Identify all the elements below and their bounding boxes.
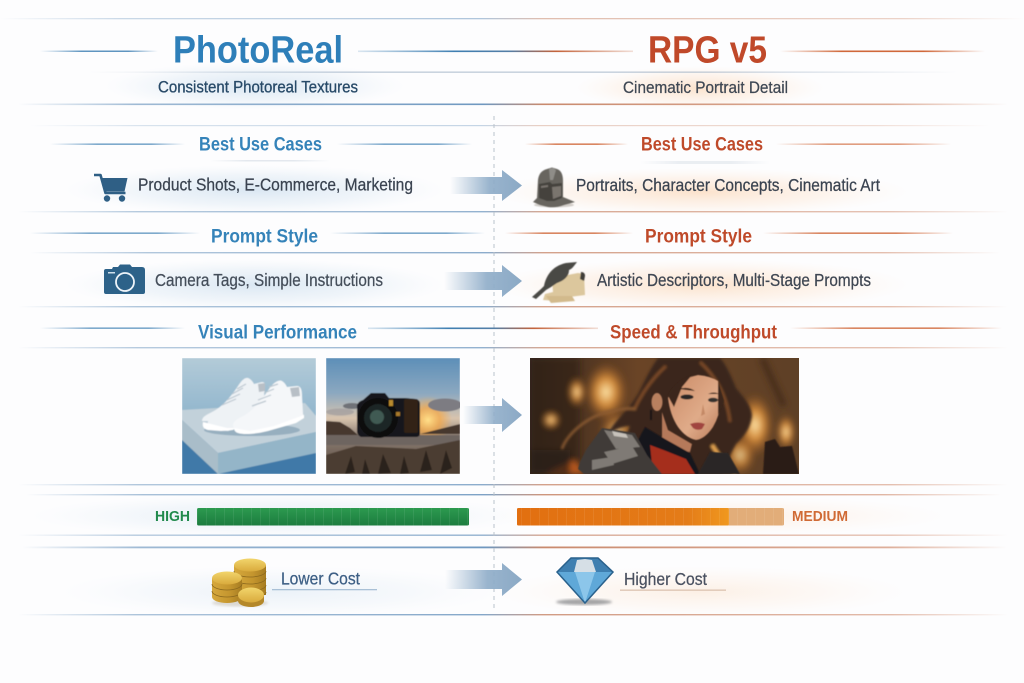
center dashed divider xyxy=(493,116,495,612)
heading: Visual Performance: Visual Performance xyxy=(198,322,357,344)
arrow: prompt style xyxy=(444,265,522,297)
heading: Best Use Cases right: Best Use Cases xyxy=(641,134,763,156)
title: PhotoReal: PhotoReal xyxy=(173,30,343,72)
text: Lower Cost: Lower Cost xyxy=(281,568,360,588)
text: PhotoReal use cases: Product Shots, E-Commerce, Marketing xyxy=(138,174,413,194)
bar chart: PhotoReal HIGH xyxy=(155,508,469,526)
icon: knight helmet xyxy=(533,168,575,208)
text: PhotoReal prompt style: Camera Tags, Simple Instructions xyxy=(155,270,383,290)
heading: Speed and Throughput: Speed & Throughput xyxy=(610,322,778,344)
heading: Best Use Cases left: Best Use Cases xyxy=(199,134,322,156)
bar chart: RPG v5 MEDIUM: MEDIUM xyxy=(792,509,848,525)
heading: Prompt Style right: Prompt Style xyxy=(645,226,752,248)
bar chart: RPG v5 MEDIUM xyxy=(517,508,848,526)
center section line xyxy=(368,328,598,329)
icon: shopping cart xyxy=(94,175,128,202)
image: camera at sunset xyxy=(326,358,462,474)
icon: diamond xyxy=(556,558,613,605)
image: white sneakers on a plinth xyxy=(182,358,316,474)
icon: gold coins xyxy=(212,558,268,607)
heading: Prompt Style left: Prompt Style xyxy=(211,226,318,248)
subtitle: RPG v5: Cinematic Portrait Detail xyxy=(623,79,788,97)
arrow: use cases xyxy=(450,170,522,201)
image: cinematic warrior portrait xyxy=(530,358,799,475)
text: Higher Cost: Higher Cost xyxy=(624,569,707,589)
arrow: cost xyxy=(445,563,522,596)
bar chart: PhotoReal HIGH: HIGH xyxy=(155,509,190,525)
title: RPG v5: RPG v5 xyxy=(648,30,767,72)
center header line xyxy=(358,50,633,52)
text: RPG prompt style: Artistic Descriptors, Multi-Stage Prompts xyxy=(597,270,871,290)
text: RPG use cases: Portraits, Character Concepts, Cinematic Art xyxy=(576,175,880,195)
icon: camera xyxy=(104,264,145,294)
icon: quill and scroll xyxy=(532,262,585,303)
arrow: visual performance xyxy=(463,398,522,432)
subtitle: PhotoReal: Consistent Photoreal Textures xyxy=(158,78,358,96)
